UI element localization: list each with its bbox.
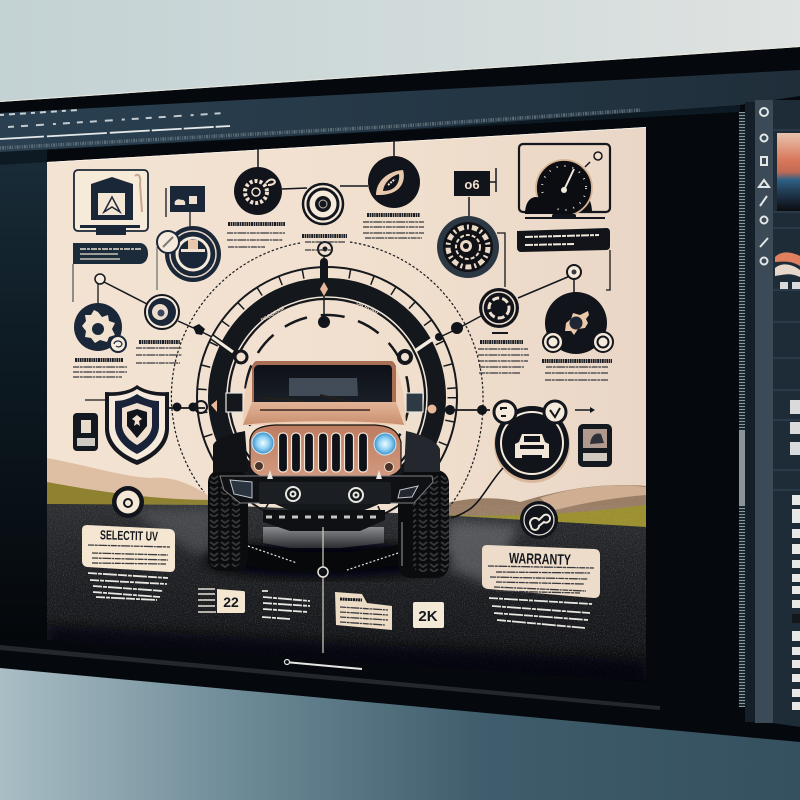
select body lines [88, 545, 170, 564]
under shadow [248, 544, 398, 572]
text block: select caption [88, 573, 168, 600]
small thumbnails [780, 282, 800, 455]
left grass [47, 482, 208, 505]
vertical ruler [739, 112, 745, 707]
paper background [47, 120, 647, 540]
top axis [318, 242, 332, 328]
skid lights [266, 516, 380, 518]
stat: 22 [198, 589, 245, 613]
text block: left gear [73, 360, 127, 377]
stat: 22: 22 [223, 594, 239, 610]
right connector [399, 333, 443, 363]
circle marker left road [112, 486, 144, 518]
panel: warranty [482, 545, 600, 598]
wall background bottom [0, 660, 800, 800]
shield connector [168, 400, 217, 413]
road glare right [440, 520, 520, 585]
circle marker right road [520, 501, 558, 539]
gradient swatch [777, 133, 800, 211]
icon: top target [303, 184, 343, 224]
right mirror [406, 393, 423, 419]
dotted tow lines [248, 546, 398, 570]
ring label right: ON ROAD [355, 300, 379, 316]
roof band [252, 361, 396, 406]
text block: road middle [262, 591, 310, 619]
asphalt texture [47, 505, 647, 680]
application toolbar [0, 70, 800, 165]
bottom shelf strip [0, 645, 660, 710]
thick black ring [219, 289, 435, 505]
warranty body lines [488, 566, 594, 593]
white inner line [227, 297, 427, 497]
indicators [254, 462, 394, 472]
bumper centre plate [259, 482, 391, 504]
text block: top target [302, 236, 347, 250]
icon: top leaf circle [340, 140, 420, 208]
right tyre [398, 470, 449, 578]
right tool strip [745, 100, 773, 723]
bumper [220, 476, 433, 503]
inner dark dashes [245, 315, 409, 479]
left headlight [252, 432, 274, 454]
text block: top gear [227, 224, 285, 247]
poster bottom fade [47, 625, 646, 690]
icon: camera circle [145, 295, 179, 329]
bumper side lights [230, 480, 418, 498]
text block: camera [136, 342, 182, 363]
icon: dome circle [543, 292, 613, 354]
right fender [404, 431, 440, 472]
right headlight [374, 433, 396, 455]
left tyre [208, 470, 248, 571]
hood [243, 402, 404, 425]
lower skid [263, 510, 385, 531]
text block: top leaf [363, 215, 424, 238]
toolbar icon row one [0, 110, 78, 115]
fog lights [286, 487, 363, 502]
right pale hills [540, 485, 646, 510]
icon: maze circle [437, 216, 505, 287]
left canvas column [0, 146, 47, 640]
toolbar icon row two [8, 113, 225, 127]
windscreen [254, 365, 392, 402]
label: dark pill right [517, 228, 610, 290]
icon: top gear circle [234, 149, 307, 215]
arrow right [575, 407, 595, 413]
left mirror [226, 393, 243, 419]
icon: car badge [494, 401, 570, 483]
wall background top [0, 0, 800, 130]
infographic poster [47, 120, 647, 690]
dashed outer arc [171, 242, 483, 506]
tool icons [759, 108, 769, 264]
windscreen reflection [289, 378, 358, 396]
curved connector to road [451, 468, 503, 518]
right properties panel [773, 100, 800, 727]
layers list thumbnails [792, 495, 800, 710]
ruler ticks [0, 110, 640, 148]
gap under jeep [263, 527, 384, 548]
panel: tab card [335, 592, 392, 630]
road glare left [137, 505, 208, 560]
warranty heading: WARRANTY [509, 550, 571, 569]
icon: lock box: o6 [464, 177, 480, 192]
icon: lock box [454, 168, 496, 217]
icon: gear circle left [74, 284, 126, 352]
text block: warranty caption [489, 598, 592, 628]
grille slots [278, 433, 368, 472]
right grass [449, 505, 646, 527]
hood edge [260, 409, 370, 411]
vertical axis below jeep [318, 527, 328, 653]
select heading: SELECTIT UV [100, 527, 158, 544]
right side connector [428, 404, 490, 415]
left fender [213, 431, 248, 472]
label: dark pill left [73, 243, 148, 302]
radial dial graphic [171, 242, 483, 527]
tow hooks [267, 470, 382, 479]
icon: gauge panel [519, 144, 610, 219]
ground shadow [201, 542, 451, 578]
outer ring ticks [202, 272, 452, 522]
left hills [47, 458, 208, 500]
wave thumbnails [775, 252, 800, 266]
icon: small document right [578, 424, 612, 467]
connectors right [440, 265, 581, 337]
stat: 2K [413, 602, 444, 628]
bright ruler line [0, 126, 230, 139]
icon: small screen [166, 186, 205, 228]
panel: select up [82, 525, 175, 572]
icon: security shield [85, 385, 169, 465]
cab surround [243, 362, 406, 425]
jeep vehicle [201, 361, 451, 578]
left connector [212, 337, 247, 363]
node and connector left [95, 274, 212, 337]
ring label left: PROGRAM [260, 305, 286, 324]
icon: small document left [73, 413, 98, 451]
wipers [262, 395, 370, 414]
icon: swirl circle [479, 288, 519, 333]
timeline pill [285, 662, 362, 669]
right hills [449, 485, 646, 516]
road surface [47, 504, 646, 659]
text block: dome [542, 361, 612, 380]
grille panel [250, 425, 401, 478]
poster top highlight [47, 127, 646, 162]
text block: swirl [478, 342, 529, 373]
thin outer ring [197, 267, 457, 527]
panel divider lines [773, 130, 800, 490]
panel: monitor icon [74, 170, 148, 235]
icon: target ring [157, 226, 221, 290]
scrollbar thumb [739, 430, 745, 506]
stat: 2K: 2K [418, 608, 438, 625]
